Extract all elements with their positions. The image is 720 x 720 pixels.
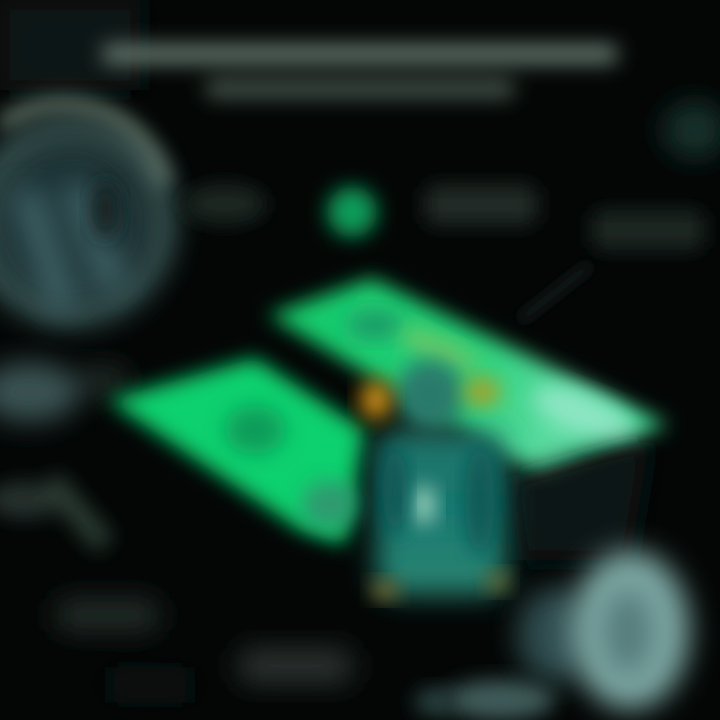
text block: upper left: [183, 184, 267, 224]
dark card shadow: [510, 440, 650, 560]
icon: green dot: [327, 187, 377, 237]
panel: left green card: [108, 358, 365, 545]
icon: large circular logo: [0, 104, 165, 314]
panel: right green card: [268, 278, 668, 478]
text block: left middle: [0, 362, 130, 422]
text block: bottom centre: [238, 648, 353, 684]
icon: bottle: [360, 359, 510, 600]
title: [102, 44, 618, 98]
connector line: [520, 265, 590, 320]
text block: upper centre: [425, 185, 537, 225]
text block: upper right: [592, 210, 704, 250]
text block: bottom left: [55, 598, 195, 694]
icon: coins: [415, 550, 690, 720]
text block: left lower: [0, 480, 105, 545]
